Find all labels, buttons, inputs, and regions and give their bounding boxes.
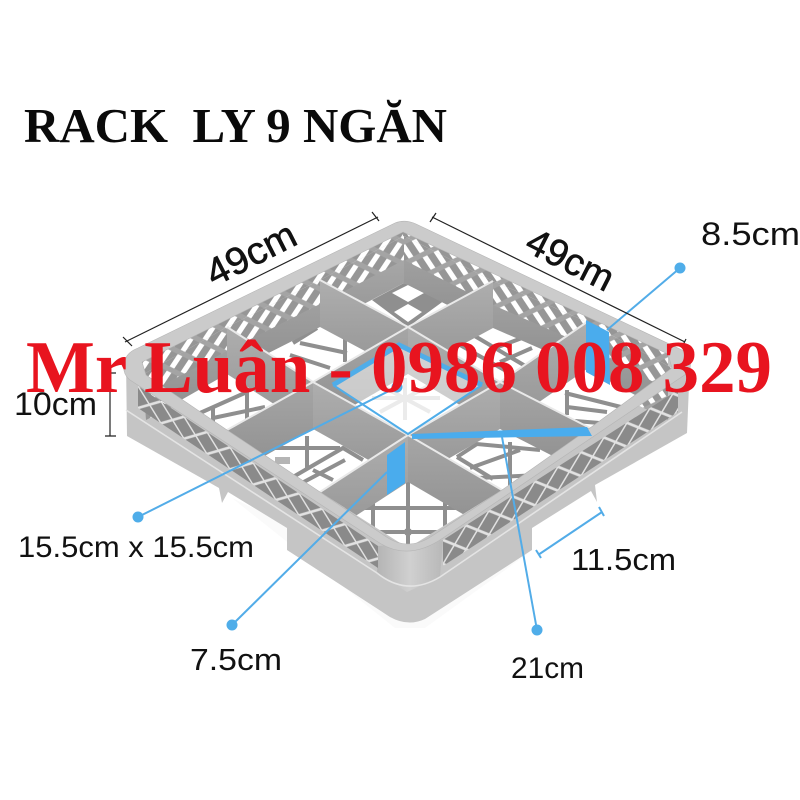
blue highlight: center cell 15.5 x 15.5 — [333, 345, 482, 434]
front left wall lattice — [138, 386, 378, 568]
callout line: 8.5cm — [607, 262, 686, 330]
blue highlight: divider height 7.5 — [387, 442, 405, 495]
cell: back — [321, 236, 492, 326]
callout line: 7.5cm — [226, 472, 387, 630]
cell: left — [146, 327, 311, 430]
dimension bracket: left 49cm — [123, 212, 379, 346]
top rim — [124, 221, 690, 551]
rack outer body — [126, 240, 690, 623]
title: RACK LY 9 NGĂN — [24, 98, 447, 153]
label: 11.5cm: 11.5cm — [571, 542, 676, 577]
cell: front left — [228, 383, 406, 492]
cell: right — [502, 324, 672, 428]
cell: back right — [410, 281, 586, 381]
seam between rack bands — [126, 410, 682, 586]
blue highlight: divider height 8.5 — [586, 320, 610, 385]
label: 7.5cm: 7.5cm — [190, 642, 282, 677]
rack illustration — [124, 221, 690, 628]
callout line: 21cm — [502, 437, 542, 636]
dimension bracket: 11.5cm — [536, 507, 604, 558]
label: 15.5cm x 15.5cm: 15.5cm x 15.5cm — [18, 531, 254, 564]
cell: back left — [228, 280, 406, 381]
watermark: contact phone: Mr Luân - 0986 008 329 — [26, 327, 772, 409]
cell: front — [322, 436, 500, 544]
label: 8.5cm: 8.5cm — [701, 216, 800, 252]
divider tops — [227, 280, 590, 492]
callout line: 15.5cm x 15.5cm — [132, 382, 402, 522]
label: 10cm: 10cm — [14, 386, 97, 422]
back wall lattice, right — [403, 232, 668, 420]
dimension bracket: 10cm — [105, 373, 116, 436]
floor shadow — [232, 498, 530, 628]
front right wall lattice — [443, 390, 678, 566]
front corner wall — [377, 540, 443, 592]
back wall lattice, left — [142, 232, 404, 420]
label: left 49cm: 49cm — [199, 214, 304, 295]
label: 21cm: 21cm — [511, 652, 584, 685]
cell: front right — [410, 383, 588, 490]
label: right 49cm: 49cm — [519, 221, 621, 300]
cell: center — [315, 328, 498, 432]
dimension bracket: right 49cm — [430, 213, 686, 347]
blue highlight: divider length 21 — [412, 427, 592, 439]
